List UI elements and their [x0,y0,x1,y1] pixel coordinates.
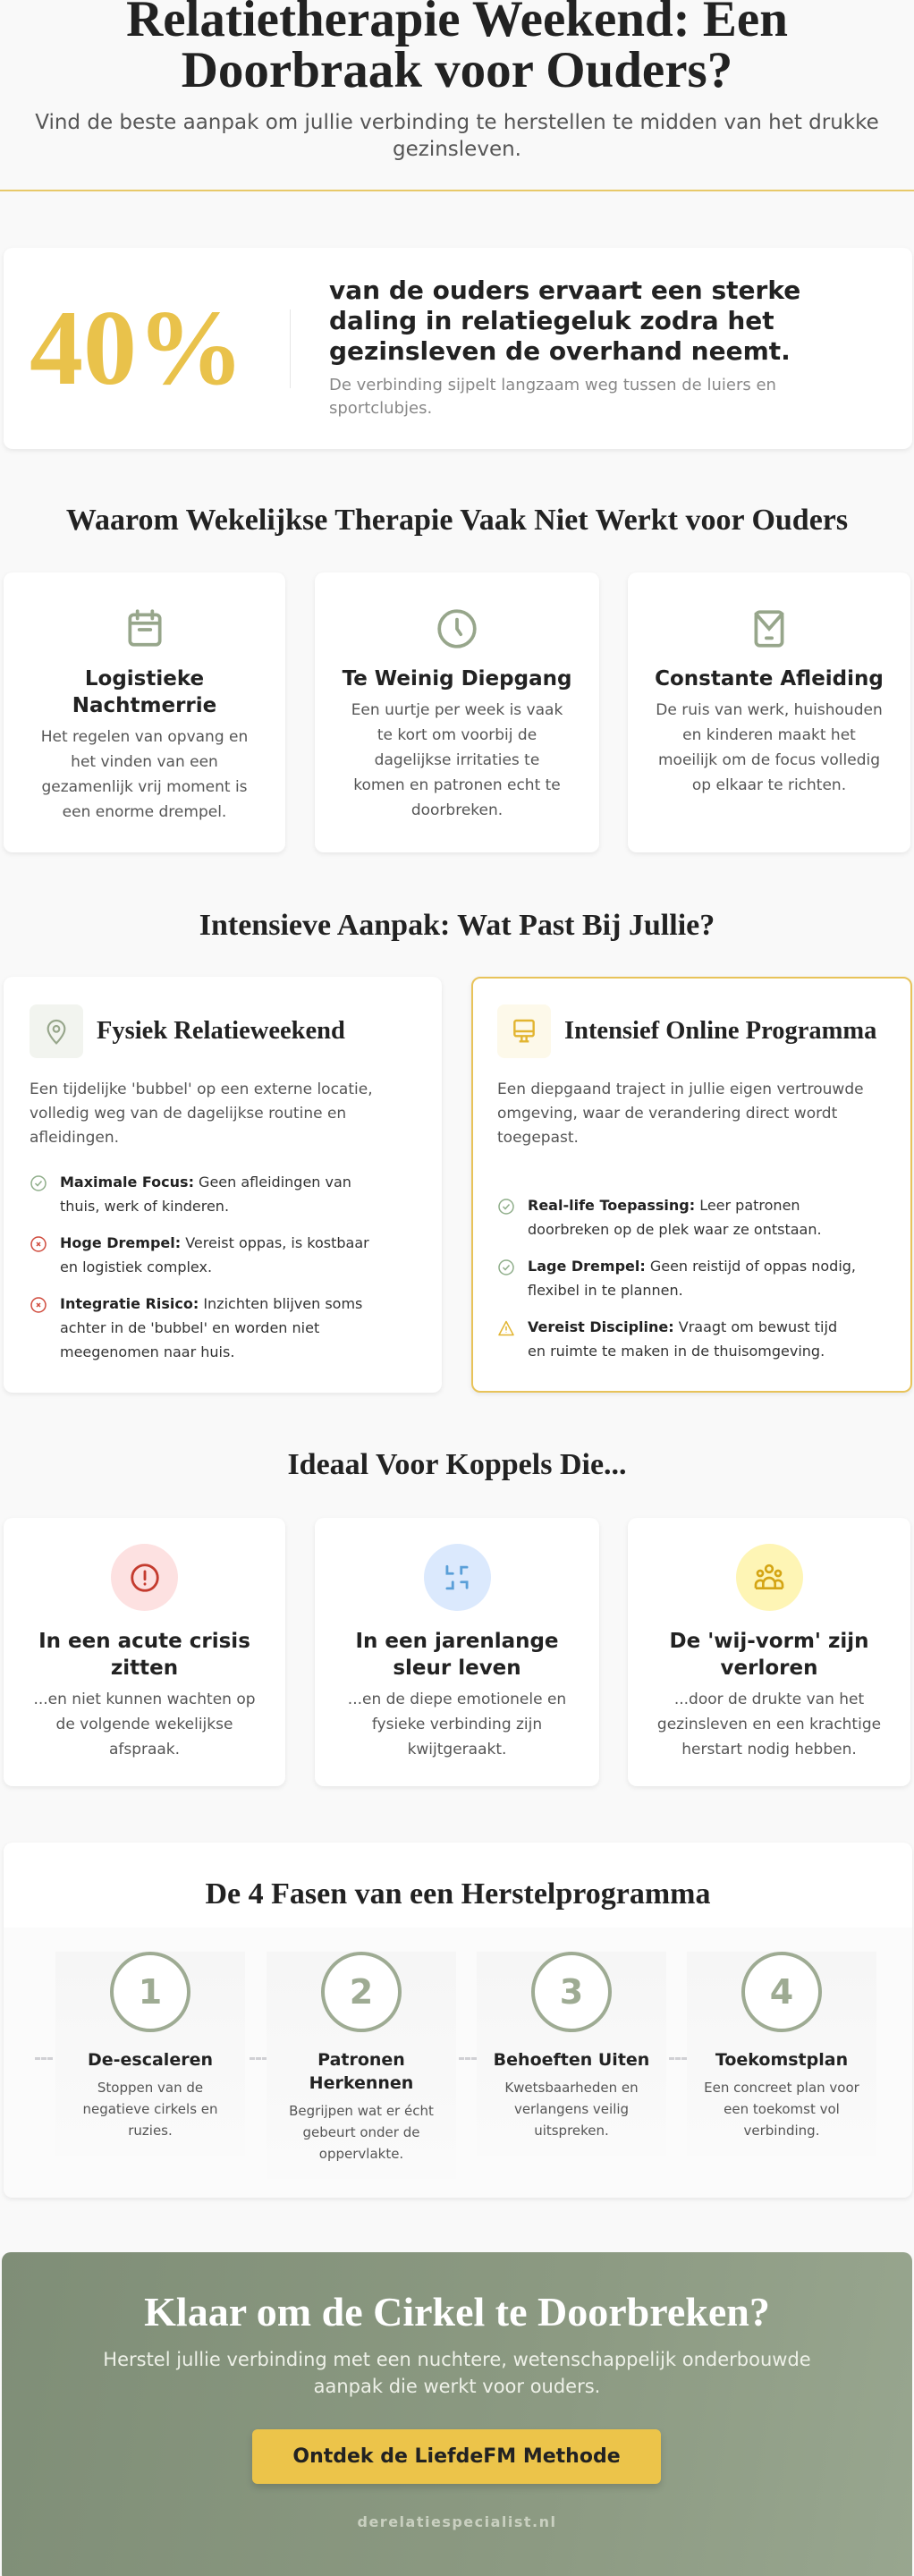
title: Doorbraak voor Ouders? [182,42,732,98]
icon: alert circle [111,1544,178,1611]
step 2: Herkennen [309,2073,413,2093]
panel: wij-vorm verloren: De 'wij-vorm' zijn [669,1630,868,1653]
panel: wij-vorm verloren [628,1518,910,1786]
panel: te weinig diepgang: Een uurtje per week is vaak te kort om voorbij de dagelijkse irritaties te komen en patronen echt te doorbreken. [351,701,563,819]
step 2: Begrijpen wat er écht gebeurt onder de oppervlakte. [289,2103,434,2162]
heading: De 4 Fasen van een Herstelprogramma [206,1877,710,1911]
icon: phone [754,610,783,648]
panel: jarenlange sleur: ...en de diepe emotionele en fysieke verbinding zijn kwijtgeraakt. [348,1690,566,1758]
panel: te weinig diepgang: Te Weinig Diepgang [343,667,571,691]
heading: waarom: Waarom Wekelijkse Therapie Vaak Niet Werkt voor Ouders [66,504,848,537]
panel: constante afleiding [628,572,910,852]
footer url: derelatiespecialist.nl [358,2513,556,2530]
heading: Fysiek Relatieweekend [97,1017,345,1045]
step 4 [687,1952,876,2156]
button: Ontdek de LiefdeFM Methode [292,2445,621,2468]
icon: monitor [497,1004,551,1058]
pros/cons list [498,1197,856,1360]
panel: wij-vorm verloren: ...door de drukte van het gezinsleven en een krachtige herstart nodig hebben. [657,1690,881,1758]
panel: logistieke nachtmerrie: Logistieke [85,667,204,691]
panel: 4 fasen [4,1843,912,2198]
pros/cons list: Integratie Risico: Inzichten blijven soms achter in de 'bubbel' en worden niet meegenomen naar huis. [60,1295,362,1360]
step 4: Toekomstplan [715,2050,848,2070]
panel: acute crisis [4,1518,285,1786]
CTA heading: Klaar om de Cirkel te Doorbreken? [144,2289,770,2334]
panel: jarenlange sleur: sleur leven [393,1657,521,1680]
heading: Intensief Online Programma [564,1017,876,1045]
panel: call to action [2,2252,912,2576]
panel: acute crisis: ...en niet kunnen wachten op de volgende wekelijkse afspraak. [33,1690,256,1758]
subtitle: Vind de beste aanpak om jullie verbinding te herstellen te midden van het drukke gezinsleven. [35,111,879,161]
panel: logistieke nachtmerrie: Nachtmerrie [72,694,216,717]
pros/cons list: Maximale Focus: Geen afleidingen van thuis, werk of kinderen. [60,1174,351,1215]
pros/cons list: Lage Drempel: Geen reistijd of oppas nodig, flexibel in te plannen. [528,1258,856,1299]
icon: people [735,1544,803,1611]
pros/cons list: Real-life Toepassing: Leer patronen doorbreken op de plek waar ze ontstaan. [528,1197,822,1238]
panel: jarenlange sleur: In een jarenlange [355,1630,559,1653]
step 4: 4 [770,1972,793,2012]
step 2 [267,1952,456,2179]
panel: acute crisis: In een acute crisis zitten [38,1630,250,1680]
panel: wij-vorm verloren: verloren [721,1657,817,1680]
button [252,2429,661,2484]
description: Een tijdelijke 'bubbel' op een externe locatie, volledig weg van de dagelijkse routine en afleidingen. [30,1080,373,1147]
title [126,0,788,98]
step 1: De-escaleren [88,2050,213,2070]
panel: fysiek relatieweekend [4,977,442,1393]
step 2: 2 [350,1972,373,2012]
step 3 [477,1952,666,2156]
panel: constante afleiding: Constante Afleiding [655,667,884,691]
icon: clock [437,609,477,648]
pros/cons list: Vereist Discipline: Vraagt om bewust tijd en ruimte te maken in de thuisomgeving. [528,1318,837,1360]
step 4: Een concreet plan voor een toekomst vol verbinding. [704,2080,859,2139]
CTA text: Herstel jullie verbinding met een nuchtere, wetenschappelijk onderbouwde aanpak die werkt voor ouders. [103,2349,811,2397]
step 1: Stoppen van de negatieve cirkels en ruzies. [82,2080,218,2139]
panel: logistieke nachtmerrie: Het regelen van opvang en het vinden van een gezamenlijk vrij moment is een enorme drempel. [41,728,248,821]
step 3: Behoeften Uiten [494,2050,649,2070]
pros/cons list [30,1174,369,1360]
step 3: 3 [560,1972,583,2012]
panel: jarenlange sleur [315,1518,599,1786]
stat headline: van de ouders ervaart een sterke daling in relatiegeluk zodra het gezinsleven de overhand neemt. [329,275,800,366]
step 2: Patronen [317,2050,405,2070]
panel: te weinig diepgang [315,572,599,852]
stat headline: De verbinding sijpelt langzaam weg tussen de luiers en sportclubjes. [329,376,776,418]
icon: location pin [30,1004,345,1058]
panel: stat card [4,248,912,449]
heading: ideaal voor koppels: Ideaal Voor Koppels Die... [287,1448,627,1481]
big stat 40%: 40% [30,288,244,407]
icon: calendar [128,609,162,647]
panel: constante afleiding: De ruis van werk, huishouden en kinderen maakt het moeilijk om de focus volledig op elkaar te richten. [656,701,883,794]
panel: intensief online programma [471,977,912,1393]
step 3: Kwetsbaarheden en verlangens veilig uitspreken. [504,2080,639,2139]
stat headline [329,275,800,418]
panel: logistieke nachtmerrie [4,572,285,852]
step 1: 1 [139,1972,162,2012]
pros/cons list: Hoge Drempel: Vereist oppas, is kostbaar en logistiek complex. [60,1234,369,1275]
heading: intensieve aanpak: Intensieve Aanpak: Wat Past Bij Jullie? [199,909,715,942]
description: Een diepgaand traject in jullie eigen vertrouwde omgeving, waar de verandering direct wordt toegepast. [497,1080,864,1147]
step 1 [55,1952,245,2156]
icon: minimize [424,1544,490,1611]
